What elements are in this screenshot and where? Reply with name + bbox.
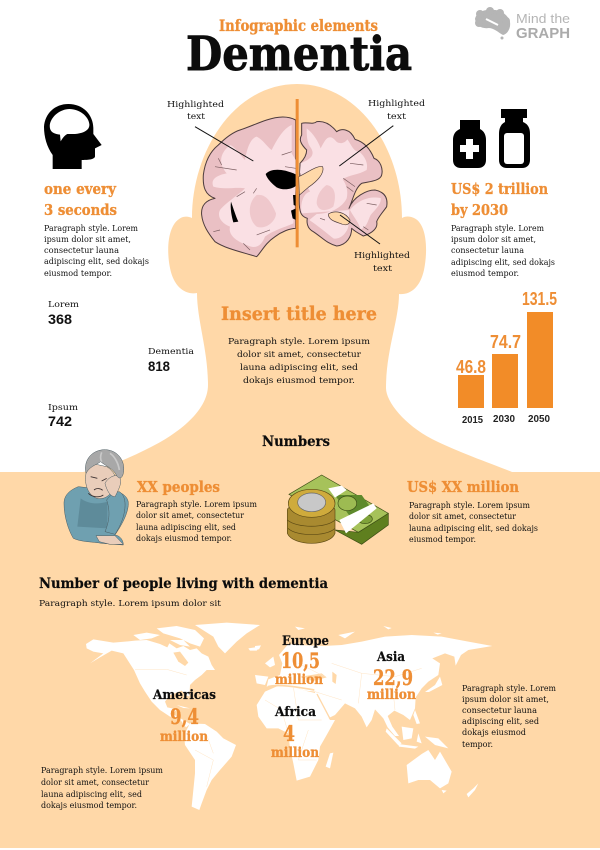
- paragraph: [409, 501, 538, 544]
- map label: Asia: million: [367, 687, 416, 703]
- paragraph: launa adipiscing elit, sed dokajs: [409, 524, 538, 533]
- heading: US$ XX million: [407, 479, 519, 496]
- right hemisphere: [299, 121, 387, 246]
- heading: US$ 2 trillion: [451, 180, 548, 198]
- map label: Europe: [275, 634, 329, 688]
- ventricle right: [299, 166, 323, 195]
- paragraph: map right: dokajs eiusmod: [462, 728, 526, 737]
- stat: Ipsum: Ipsum: [48, 403, 78, 412]
- main title: Dementia: [186, 27, 412, 82]
- paragraph: launa adipiscing elit, sed: [136, 523, 236, 532]
- paragraph: Paragraph style. Lorem ipsum: [409, 501, 530, 510]
- paragraph: map right: Paragraph style. Lorem: [462, 684, 556, 693]
- label lines: [195, 126, 393, 244]
- heading: one every: [44, 180, 117, 198]
- subheading paragraph: Paragraph style. Lorem ipsum dolor sit: [39, 599, 222, 608]
- map label: Asia: [367, 650, 416, 703]
- label top right: text: [387, 112, 407, 121]
- Eurasia, Africa and Oceania: [255, 626, 492, 797]
- stat: Dementia: 818: [148, 359, 170, 374]
- paragraph: eiusmod tempor.: [44, 269, 112, 278]
- paragraph: dokajs eiusmod tempor.: [243, 376, 355, 385]
- paragraph: adipiscing elit, sed dokajs: [451, 258, 555, 267]
- bar chart: 2015: [462, 415, 483, 426]
- right white matter: [300, 128, 381, 239]
- stat: Dementia: [148, 347, 194, 374]
- logo: Mind the Graph: GRAPH: [516, 25, 570, 42]
- label top left: text: [187, 112, 206, 121]
- paragraph: eiusmod tempor.: [451, 269, 519, 278]
- label bottom: [354, 251, 410, 273]
- bar chart: 2050: [528, 414, 550, 425]
- heading: Insert title here: [221, 303, 377, 325]
- brain illustration: [195, 99, 393, 257]
- paragraph: [44, 224, 149, 278]
- paragraph: map right: tempor.: [462, 740, 493, 749]
- label top left: Highlighted: [167, 100, 224, 109]
- world map: [86, 623, 492, 810]
- paragraph: dolor sit amet, consectetur: [136, 511, 244, 520]
- heading: Numbers: Numbers: [262, 434, 330, 450]
- heading: XX peoples: [137, 479, 220, 496]
- left deep cortex: [250, 195, 276, 227]
- map label: Americas: [152, 688, 216, 745]
- logo: Mind the Graph: [475, 7, 570, 42]
- label top right: [368, 99, 425, 121]
- map label: Americas: million: [160, 729, 208, 745]
- paragraph: [136, 500, 257, 543]
- paragraph: map left: dokajs eiusmod tempor.: [41, 801, 137, 810]
- paragraph: ipsum dolor sit amet,: [451, 235, 536, 244]
- Americas and Greenland: [86, 623, 260, 810]
- icon: head with brain: [44, 104, 102, 169]
- icon: banknotes and coins: [287, 475, 388, 544]
- bar chart: 131.5: [522, 289, 557, 309]
- title block: [186, 16, 412, 82]
- map label: Europe: Europe: [282, 634, 329, 649]
- stat: Lorem: 368: [48, 312, 73, 327]
- paragraph: map left: launa adipiscing elit, sed: [41, 790, 142, 799]
- heading: number of people: Number of people living with dementia: [39, 576, 328, 592]
- paragraph: dolor sit amet, consectetur: [409, 512, 516, 521]
- paragraph: Paragraph style. Lorem: [451, 224, 544, 233]
- paragraph: launa adipiscing elit, sed: [240, 363, 358, 372]
- logo: Mind the Graph: Mind the: [516, 11, 570, 26]
- map label: Americas: Americas: [152, 688, 216, 703]
- map label: Africa: million: [271, 745, 319, 761]
- paragraph: map right: ipsum dolor sit amet,: [462, 695, 549, 704]
- icon: small medicine bottle: [453, 120, 486, 168]
- paragraph: map right: [462, 684, 556, 749]
- bar chart: 46.8: [456, 357, 486, 377]
- left hemisphere: [202, 117, 296, 257]
- panel: cost US$ 2 trillion: [451, 109, 555, 278]
- map label: Africa: Africa: [274, 705, 317, 720]
- map label: Europe: million: [275, 672, 323, 688]
- paragraph: dolor sit amet, consectetur: [237, 350, 361, 359]
- label bottom: text: [373, 264, 393, 273]
- stat: Lorem: Lorem: [48, 300, 79, 309]
- paragraph: adipiscing elit, sed dokajs: [44, 257, 149, 266]
- bar chart: 74.7: [490, 332, 521, 352]
- stat: Lorem: [48, 300, 79, 327]
- label bottom: Highlighted: [354, 251, 410, 260]
- paragraph: map left: dolor sit amet, consectetur: [41, 778, 149, 787]
- panel: one every 3 seconds: 3 seconds: [44, 201, 117, 219]
- divider line: [296, 99, 299, 247]
- subtitle: Infographic elements: [219, 16, 378, 35]
- paragraph: consectetur launa: [44, 246, 119, 255]
- map label: Americas: 9,4: [170, 704, 199, 729]
- panel: XX peoples: [64, 450, 257, 545]
- paragraph: Paragraph style. Lorem ipsum: [228, 337, 370, 346]
- paragraph: map left: [41, 766, 163, 810]
- paragraph: map right: adipiscing elit, sed: [462, 717, 539, 726]
- label top right: Highlighted: [368, 99, 425, 108]
- map label: Asia: Asia: [376, 650, 406, 665]
- right deep cortex: [317, 185, 335, 210]
- stat: Dementia: Dementia: [148, 347, 194, 356]
- paragraph: [228, 337, 370, 385]
- paragraph: eiusmod tempor.: [409, 535, 476, 544]
- black atrophy areas: [231, 170, 296, 222]
- panel: statistics: [48, 300, 194, 429]
- paragraph: consectetur launa: [451, 246, 524, 255]
- paragraph: [451, 224, 555, 278]
- paragraph: Paragraph style. Lorem: [44, 224, 138, 233]
- paragraph: map right: consectetur launa: [462, 706, 537, 715]
- panel: cost US$ 2 trillion: by 2030: [451, 201, 508, 219]
- map label: Europe: 10,5: [281, 648, 320, 673]
- stat: Ipsum: 742: [48, 414, 72, 429]
- panel: one every 3 seconds: [44, 104, 149, 278]
- paragraph: map left: Paragraph style. Lorem ipsum: [41, 766, 163, 775]
- icon: large medicine bottle: [499, 109, 530, 168]
- map label: Asia: 22,9: [373, 665, 413, 690]
- bar chart: [456, 289, 557, 426]
- paragraph: dokajs eiusmod tempor.: [136, 534, 232, 543]
- left white matter: [213, 125, 296, 247]
- center text block: [221, 303, 377, 385]
- hippocampus gap: [328, 212, 350, 225]
- icon: worried elderly person: [64, 450, 128, 545]
- map label: Africa: 4: [283, 721, 295, 746]
- paragraph: ipsum dolor sit amet,: [44, 235, 131, 244]
- map label: Africa: [271, 705, 319, 761]
- panel: US$ XX million: [287, 475, 538, 544]
- bar chart: 2030: [493, 414, 515, 425]
- label top left: [167, 100, 224, 121]
- paragraph: Paragraph style. Lorem ipsum: [136, 500, 257, 509]
- brain labels: [167, 99, 425, 273]
- stat: Ipsum: [48, 403, 78, 429]
